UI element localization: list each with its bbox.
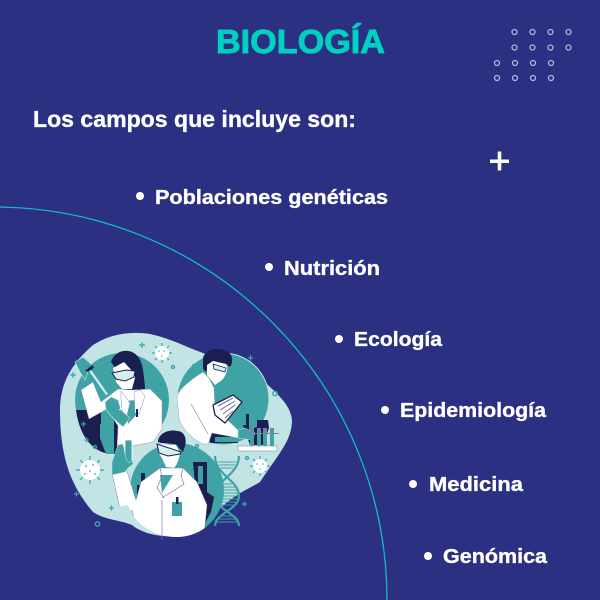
background blob [60, 333, 292, 536]
virus icons [70, 342, 277, 526]
man with test tube [112, 431, 224, 545]
man with clipboard [177, 349, 279, 451]
decorative dot grid [494, 30, 571, 80]
woman scientist [75, 351, 169, 454]
list item: Genómica: Genómica [443, 545, 548, 568]
heading: Los campos que incluye son: [33, 106, 356, 132]
list item: Epidemiología: Epidemiología [400, 399, 547, 422]
icon: plus [490, 152, 509, 170]
list item: Nutrición: Nutrición [284, 257, 380, 280]
title: BIOLOGÍA [216, 23, 385, 60]
list item: Ecología: Ecología [354, 328, 443, 351]
dna helix [215, 456, 239, 526]
list item: Poblaciones genéticas: Poblaciones genéticas [155, 186, 388, 209]
list item: Medicina: Medicina [429, 473, 524, 496]
test tube rack [238, 428, 279, 451]
list of fields [136, 186, 548, 568]
illustration: scientists [60, 333, 292, 545]
